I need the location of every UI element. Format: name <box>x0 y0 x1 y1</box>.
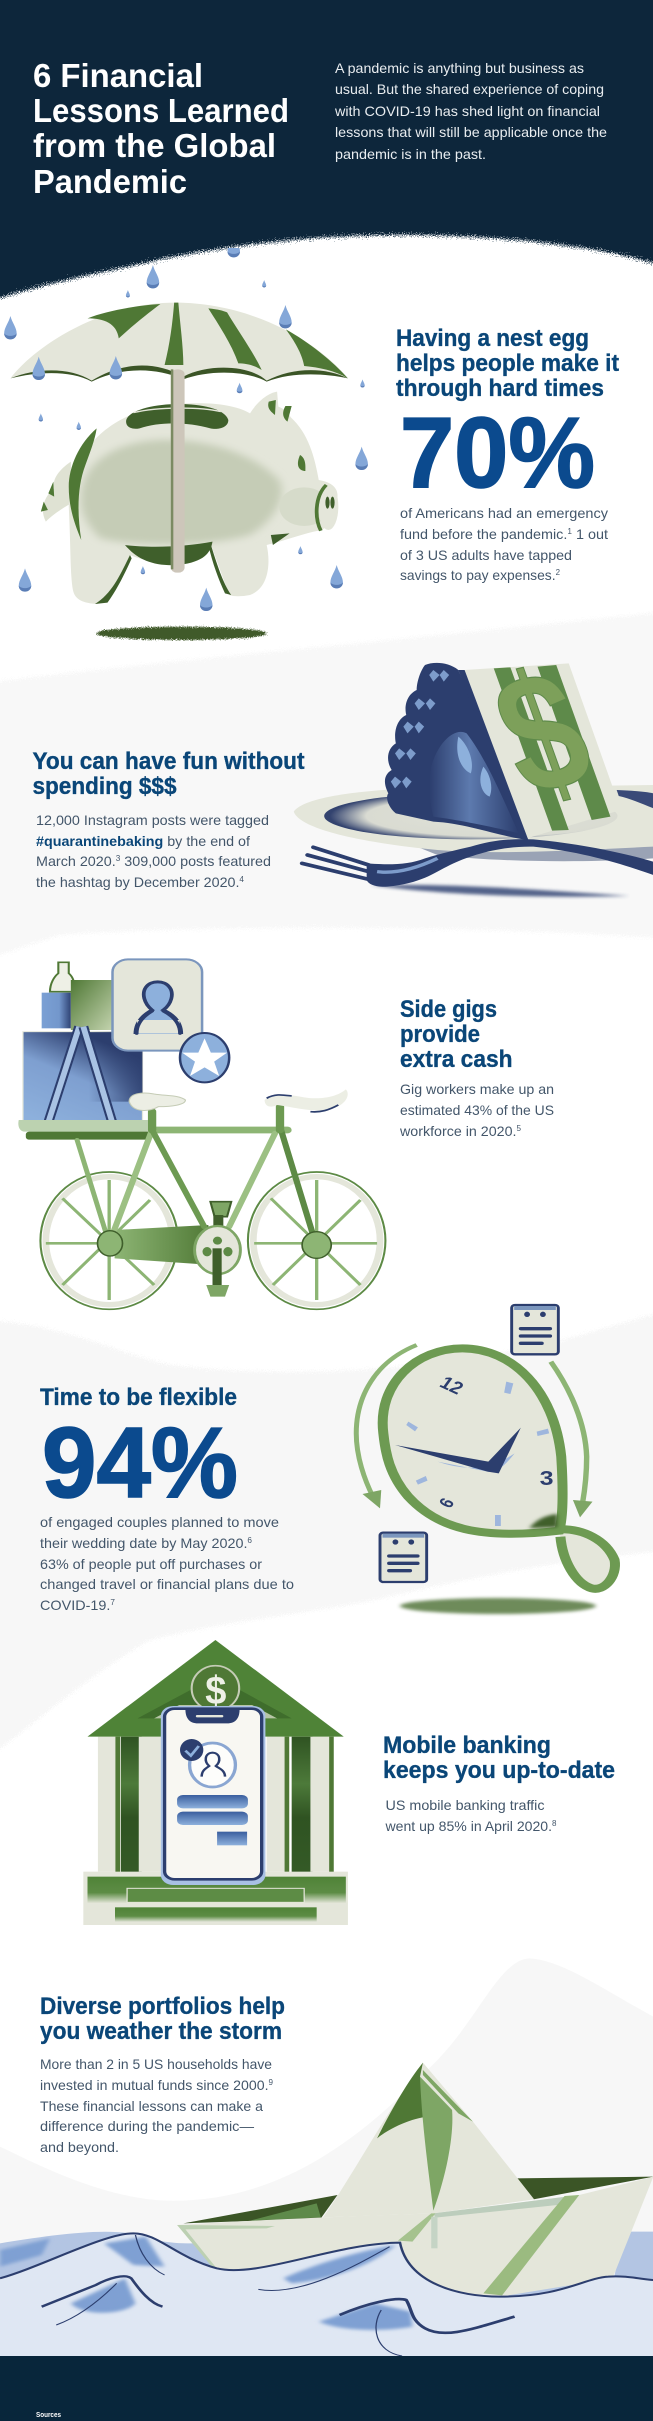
blue box <box>42 993 71 1028</box>
title <box>33 57 289 200</box>
profile card <box>113 959 202 1051</box>
body text: of engaged couples planned to move <box>40 1514 279 1530</box>
intro text: usual. But the shared experience of coping <box>335 81 604 97</box>
panel: fun without spending <box>32 633 653 897</box>
crank and pedals <box>195 1202 240 1297</box>
background hill <box>0 1958 653 2250</box>
boat hull <box>177 2177 653 2297</box>
body text: 3 <box>116 854 121 863</box>
body text: 6 <box>247 1536 253 1545</box>
wave shadows <box>0 2237 413 2330</box>
saddles <box>129 1089 348 1112</box>
body text: #quarantinebaking by the end of <box>36 833 250 849</box>
heading: Diverse portfolios help <box>40 1993 285 2020</box>
intro text: lessons that will still be applicable once the <box>335 124 607 140</box>
body text: Gig workers make up an <box>400 1081 554 1097</box>
fold shade <box>529 1514 558 1528</box>
plate <box>294 785 653 852</box>
bottle <box>50 962 75 992</box>
intro text: with COVID-19 has shed light on financial <box>334 103 600 119</box>
raindrops behind <box>4 234 368 611</box>
front water <box>0 2233 653 2356</box>
body text: of Americans had an emergency <box>400 505 608 521</box>
easel legs <box>46 1027 115 1130</box>
coin slot <box>126 404 228 429</box>
note icon bottom <box>380 1533 427 1582</box>
avatar <box>190 1743 235 1787</box>
body text: savings to pay expenses. <box>400 567 557 583</box>
umbrella canopy <box>10 303 348 382</box>
message bars <box>177 1795 248 1845</box>
pie crust <box>385 663 528 840</box>
wheel hubs <box>98 1231 331 1258</box>
pig tail <box>41 462 71 522</box>
background wash: section two <box>0 610 653 965</box>
body text: invested in mutual funds since 2000. <box>40 2077 266 2093</box>
left wheel <box>40 1172 178 1309</box>
body text: fund before the pandemic. <box>400 526 563 542</box>
pig snout <box>279 483 338 531</box>
hour marks <box>406 1382 549 1526</box>
clock face <box>383 1348 563 1534</box>
illustration: bicycle with gig items <box>18 959 385 1309</box>
bank base <box>83 1872 348 1925</box>
pig body <box>69 392 338 604</box>
heading: Having a nest egg <box>396 325 589 352</box>
body text: COVID-19. <box>40 1597 108 1613</box>
body text: 8 <box>552 1819 557 1828</box>
heading <box>32 748 305 800</box>
body text: 7 <box>110 1598 116 1607</box>
heading: provide <box>400 1021 480 1048</box>
body text <box>36 812 271 890</box>
body text: 9 <box>269 2078 274 2087</box>
laptop screen box <box>23 1032 143 1122</box>
clock hands <box>395 1428 521 1473</box>
body text: 12,000 Instagram posts were tagged <box>36 812 269 828</box>
body text: 63% of people put off purchases or <box>40 1556 262 1572</box>
illustration: bank and phone <box>83 1640 348 1925</box>
heading: Side gigs <box>400 996 497 1023</box>
body text: of 3 US adults have tapped <box>400 547 572 563</box>
chain guard <box>115 1225 213 1265</box>
illustration: paper boat on waves <box>0 1958 653 2356</box>
body text: More than 2 in 5 US households have <box>40 2056 272 2072</box>
body text: went up 85% in April 2020. <box>386 1818 551 1834</box>
pig markings <box>69 400 305 604</box>
panel: mobile banking <box>83 1640 615 1925</box>
heading <box>396 325 619 402</box>
illustration: melting clock <box>356 1305 615 1614</box>
heading <box>400 996 512 1073</box>
body text: 309,000 posts featured <box>120 853 271 869</box>
heading <box>383 1732 615 1784</box>
body text: 1 <box>567 527 573 536</box>
roof <box>88 1640 344 1737</box>
sail <box>323 2063 534 2217</box>
clock numerals: 9 <box>434 1495 458 1510</box>
intro text: pandemic is in the past. <box>335 146 486 162</box>
clock loop <box>558 1529 615 1589</box>
coin: $ <box>205 1669 227 1713</box>
heading: extra cash <box>400 1046 512 1073</box>
illustration: money pie <box>294 633 653 897</box>
header band <box>0 0 653 310</box>
back water <box>0 2232 653 2317</box>
heading: spending $$$ <box>32 773 177 800</box>
body text: and beyond. <box>40 2139 119 2155</box>
pig shadow <box>96 627 267 640</box>
raindrops in front <box>33 305 292 380</box>
intro text <box>334 60 607 162</box>
illustration: piggy bank under umbrella <box>4 234 368 640</box>
notch <box>185 1709 240 1723</box>
pig belly shading <box>81 440 282 544</box>
body text: workforce in 2020. <box>400 1123 514 1139</box>
panel: side gigs <box>18 959 554 1309</box>
wave lines <box>0 2233 653 2356</box>
body text: the hashtag by December 2020. <box>36 874 235 890</box>
clock numerals: 3 <box>540 1467 553 1489</box>
icon: dollar sign: $ <box>473 633 612 831</box>
rack <box>18 1120 151 1140</box>
body text: 4 <box>239 875 245 884</box>
clock shadow <box>400 1598 596 1614</box>
right wheel <box>248 1172 385 1309</box>
body text <box>40 1514 294 1613</box>
pie slice face <box>458 663 621 840</box>
body text: US mobile banking traffic <box>386 1797 544 1813</box>
heading: You can have fun without <box>32 748 305 775</box>
boat interior <box>183 2177 653 2223</box>
bike frame <box>77 1107 317 1247</box>
clock numerals: 12 <box>435 1373 467 1399</box>
title: from the Global <box>33 127 276 164</box>
title: Lessons Learned <box>33 92 289 129</box>
verified badge <box>180 1739 203 1761</box>
panel: time to be flexible <box>40 1305 615 1614</box>
note icon top <box>512 1305 558 1354</box>
plate shadow <box>371 885 629 897</box>
body text <box>399 1081 554 1139</box>
heading: Mobile banking <box>383 1732 551 1759</box>
right arrow <box>551 1362 593 1517</box>
phone <box>161 1706 265 1885</box>
body text: 5 <box>516 1124 522 1133</box>
background wash: section four <box>0 1307 653 1770</box>
body text: changed travel or financial plans due to <box>40 1576 294 1592</box>
title: Pandemic <box>33 163 187 200</box>
heading: you weather the storm <box>40 2018 282 2045</box>
body text: difference during the pandemic— <box>40 2118 254 2134</box>
body text: 1 out <box>572 526 608 542</box>
coin <box>192 1666 239 1713</box>
body text: 2 <box>556 568 561 577</box>
panel: diverse portfolios <box>0 1958 653 2356</box>
title: 6 Financial <box>33 57 203 94</box>
fork <box>302 839 653 887</box>
star badge <box>180 1033 229 1082</box>
body text: their wedding date by May 2020. <box>40 1535 242 1551</box>
body text: estimated 43% of the US <box>400 1102 554 1118</box>
body text <box>400 505 608 583</box>
heading: through hard times <box>396 375 604 402</box>
sources label: Sources <box>36 2412 61 2419</box>
heading: keeps you up-to-date <box>383 1757 615 1784</box>
umbrella pole <box>171 369 185 573</box>
statistic: 70%: 70% <box>400 397 595 509</box>
panel: nest egg <box>4 234 619 640</box>
body text <box>384 1797 557 1834</box>
left arrow <box>356 1345 417 1508</box>
green box <box>71 980 113 1030</box>
clock numerals <box>434 1373 553 1510</box>
body text: These financial lessons can make a <box>40 2098 263 2114</box>
heading: helps people make it <box>396 350 619 377</box>
plate underside <box>417 845 653 861</box>
heading <box>40 1993 285 2045</box>
body text: March 2020. <box>36 853 114 869</box>
statistic: 94%: 94% <box>42 1407 238 1519</box>
heading: Time to be flexible <box>40 1384 237 1411</box>
body text <box>40 2056 274 2155</box>
footer <box>0 2356 653 2421</box>
intro text: A pandemic is anything but business as <box>335 60 584 76</box>
columns <box>98 1737 334 1872</box>
